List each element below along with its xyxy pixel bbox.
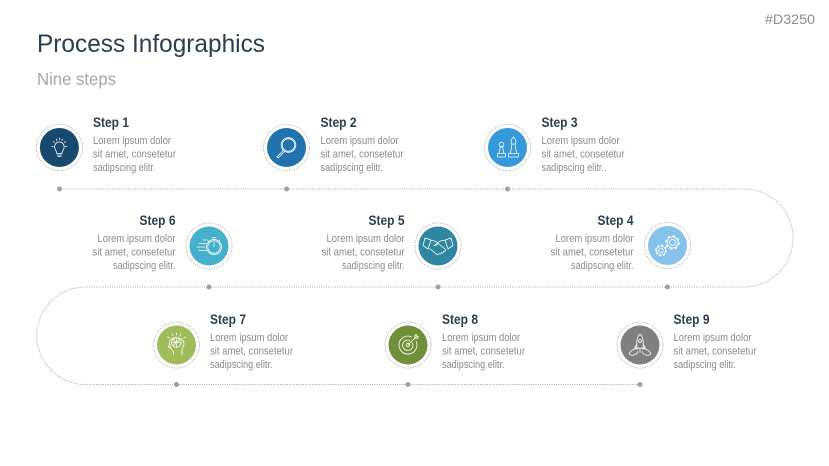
text block: sit amet, consetetur	[93, 148, 176, 160]
panel: step 3	[484, 115, 625, 174]
text block: sit amet, consetetur	[674, 346, 757, 358]
text block: sadipscing elitr.	[342, 260, 404, 272]
icon: stopwatch	[186, 223, 232, 269]
text block: sadipscing elitr.	[93, 162, 156, 174]
text block: Lorem ipsum dolor	[542, 135, 620, 147]
heading: Step 2	[320, 115, 356, 130]
panel: step 7	[154, 312, 293, 371]
text block: sit amet, consetetur	[322, 246, 405, 258]
icon: target	[385, 322, 431, 368]
text block	[320, 135, 404, 174]
subtitle: Nine steps	[37, 69, 116, 89]
text block: sadipscing elitr.	[113, 260, 176, 272]
icon: rocket	[617, 322, 663, 368]
text block: Lorem ipsum dolor	[442, 332, 520, 344]
text block: Lorem ipsum dolor	[93, 135, 171, 147]
icon: light bulb	[36, 124, 82, 170]
text block: sadipscing elitr.	[571, 260, 634, 272]
text block: sit amet, consetetur	[542, 148, 625, 160]
text block: sit amet, consetetur	[92, 246, 176, 258]
icon: handshake	[415, 223, 461, 269]
panel: step 9	[617, 312, 757, 371]
text block: sit amet, consetetur	[442, 346, 525, 358]
path markers	[57, 186, 670, 387]
icon: head with brain	[154, 322, 200, 368]
panel: step 8	[385, 312, 525, 371]
text block: Lorem ipsum dolor	[98, 233, 176, 245]
text block: sadipscing elitr.	[210, 359, 272, 371]
text block: sadipscing elitr..	[542, 162, 606, 174]
reference code: #D3250	[765, 12, 815, 27]
heading: Step 7	[210, 312, 246, 327]
text block: sadipscing elitr.	[674, 359, 736, 371]
text block: sit amet, consetetur	[550, 246, 634, 258]
heading: Step 4	[598, 213, 634, 228]
text block: Lorem ipsum dolor	[556, 233, 634, 245]
panel: step 6	[92, 213, 232, 272]
text block	[674, 332, 757, 371]
text block	[92, 233, 176, 272]
heading: Step 8	[442, 312, 478, 327]
text block: sit amet, consetetur	[320, 148, 404, 160]
heading: Step 3	[542, 115, 578, 130]
icon: gears	[644, 222, 690, 268]
text block: Lorem ipsum dolor	[320, 135, 399, 147]
text block: Lorem ipsum dolor	[674, 332, 752, 344]
text block: sit amet, consetetur	[210, 346, 293, 358]
text block	[322, 233, 405, 272]
dotted serpentine path	[37, 189, 793, 384]
text block	[550, 233, 634, 272]
heading: Step 1	[93, 115, 129, 130]
text block	[442, 332, 525, 371]
panel: step 1	[36, 115, 176, 174]
text block	[210, 332, 293, 371]
heading: Step 5	[368, 213, 405, 228]
panel: step 2	[264, 115, 404, 174]
text block: Lorem ipsum dolor	[210, 332, 288, 344]
panel: step 4	[550, 213, 690, 272]
text block	[93, 135, 176, 174]
heading: Step 6	[140, 213, 176, 228]
text block: Lorem ipsum dolor	[326, 233, 405, 245]
text block	[542, 135, 625, 174]
panel: step 5	[322, 213, 461, 272]
title: Process Infographics	[37, 30, 265, 58]
text block: sadipscing elitr.	[320, 162, 383, 174]
text block: sadipscing elitr.	[442, 359, 504, 371]
icon: chess pieces	[484, 124, 530, 170]
icon: magnifying glass	[264, 124, 310, 170]
heading: Step 9	[674, 312, 710, 327]
